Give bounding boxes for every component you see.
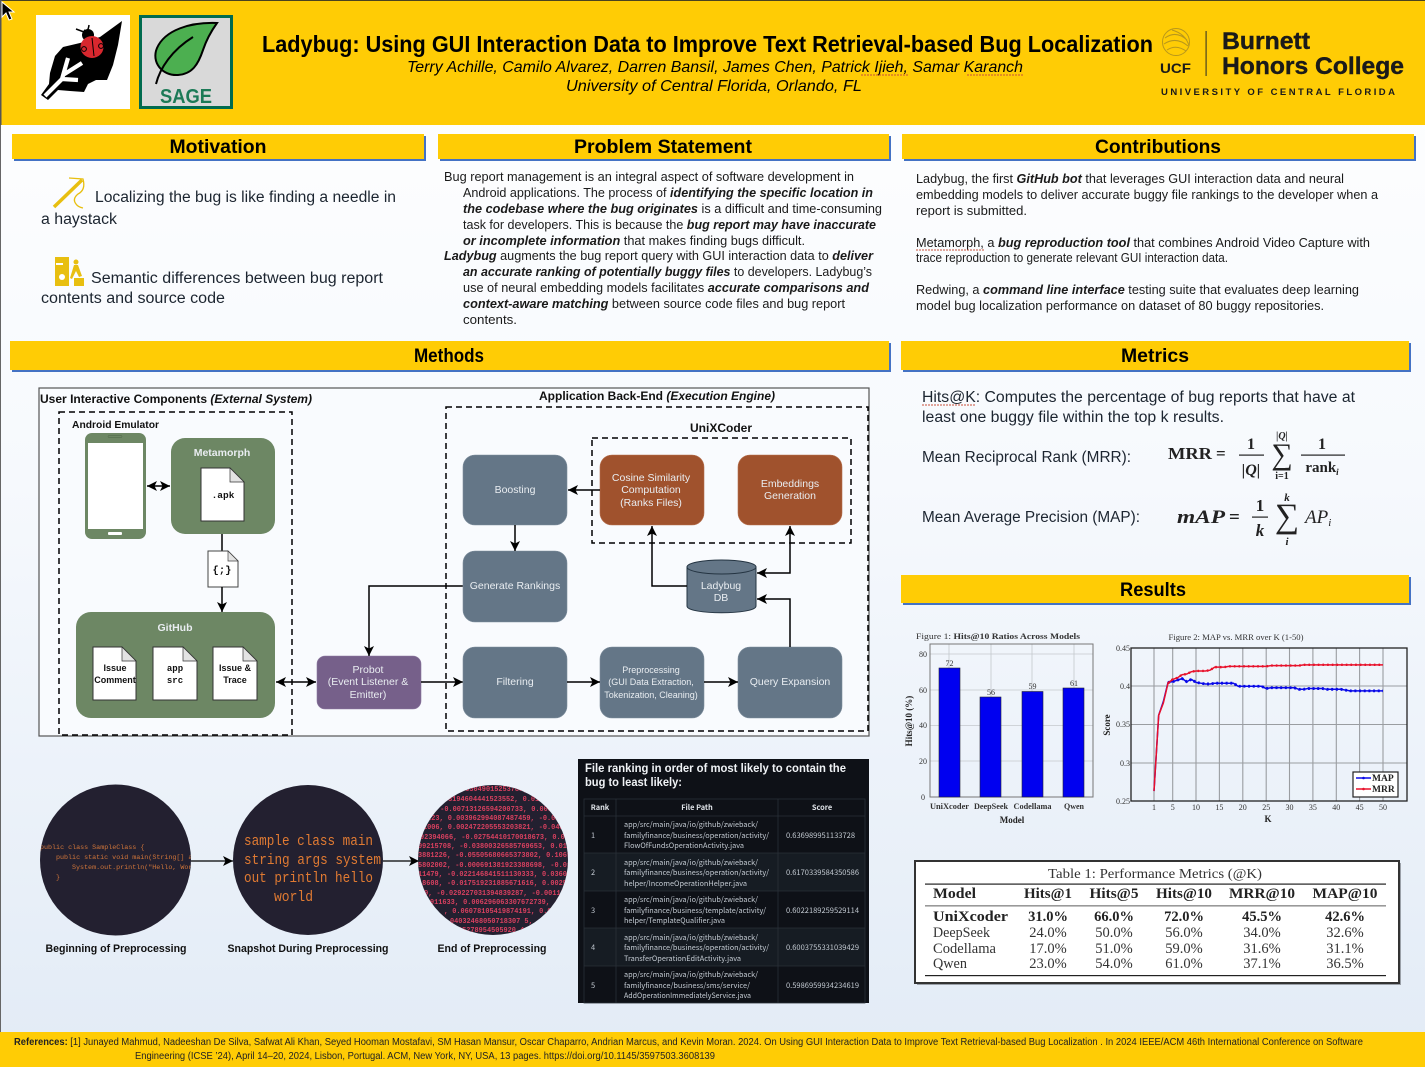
table row: Qwen: 37.1% (1243, 956, 1281, 972)
formula: map: ∑ (1275, 498, 1299, 535)
table header (933, 886, 1378, 902)
panel: problem statement (438, 134, 891, 327)
table row 2: 0.6170339584350586 (786, 867, 859, 878)
chart legend: MAP (1372, 774, 1394, 784)
table row 5: 0.5986959934234619 (786, 980, 859, 991)
heading: contributions (902, 134, 1416, 161)
stage: snapshot during preprocessing (228, 785, 388, 955)
table row: UniXcoder: 72.0% (1164, 909, 1204, 925)
stage: snapshot during preprocessing: out println hello (244, 871, 373, 887)
box: filtering (463, 647, 567, 718)
text: ladybug contribution (916, 172, 1378, 218)
bar chart: hits at 10: 72 (946, 659, 954, 668)
box: preprocessing: (GUI Data Extraction, (608, 677, 694, 687)
formula: map: k (1256, 521, 1265, 540)
box: github: src (167, 676, 183, 686)
chart axis labels: 40 (1332, 803, 1340, 812)
chart axis labels: 15 (1215, 803, 1223, 812)
box: github: Trace (223, 675, 247, 685)
text: redwing contribution (916, 283, 1359, 313)
chart axis labels: 20 (1239, 803, 1247, 812)
box: probot (317, 656, 421, 709)
references (0, 1032, 1425, 1067)
table row: UniXcoder: 45.5% (1242, 909, 1282, 925)
stage: beginning of preprocessing: public static void main(String[] args) (56, 854, 208, 862)
stage: beginning of preprocessing: System.out.println("Hello, World!"); (72, 864, 216, 872)
box: github: app (167, 664, 183, 674)
icon: ladybug logo (36, 15, 130, 109)
table heading (585, 763, 846, 789)
formula: map: i (1328, 517, 1331, 529)
table row 3: helper/TemplateQualifier.java (624, 915, 725, 926)
table heading: bug to least likely: (585, 777, 682, 789)
box: metamorph: Metamorph (194, 447, 250, 459)
affiliation: University of Central Florida, Orlando, FL (566, 78, 862, 95)
text: problem statement body: contents. (463, 313, 517, 327)
text: needle in a haystack: Localizing the bug is like finding a needle in (95, 189, 396, 206)
table row: Codellama: 17.0% (1029, 941, 1067, 957)
table row 4: 4 (591, 942, 595, 953)
heading: methods (10, 341, 891, 372)
stage: end of preprocessing: 18608, -0.017519231885671616, 0.002535 (418, 880, 575, 888)
formula: mrr: 1 (1247, 436, 1255, 453)
table row 4 (591, 932, 859, 964)
bar chart: hits at 10: 40 (919, 721, 927, 730)
table row: Qwen (933, 956, 1364, 972)
stage: end of preprocessing: 1006, 0.002472205553203821, -0.04854 (423, 824, 572, 832)
panel: motivation (12, 134, 426, 307)
stage: beginning of preprocessing (40, 784, 191, 954)
box: metamorph: .apk (212, 490, 235, 501)
text: problem statement body (444, 170, 882, 327)
table header: Hits@10 (1156, 886, 1212, 902)
text: metamorph contribution (916, 236, 1370, 265)
bar chart: hits at 10: Codellama (1014, 802, 1052, 811)
table row: DeepSeek: 56.0% (1165, 925, 1203, 941)
box: preprocessing (600, 647, 704, 718)
performance metrics table (915, 861, 1401, 985)
bar chart: hits at 10: 80 (919, 650, 927, 659)
box: github: Issue & (219, 663, 252, 673)
heading: metrics (901, 341, 1411, 372)
box: probot: Emitter) (350, 689, 386, 701)
text: hits at k (922, 389, 1356, 426)
formula: map: = (1229, 507, 1240, 528)
formula: mrr: |Q| (1242, 462, 1260, 479)
stage: end of preprocessing: End of Preprocessing (438, 943, 546, 955)
formula: mrr: |Q| (1276, 431, 1288, 442)
table header: Hits@5 (1090, 886, 1138, 902)
table row: DeepSeek: DeepSeek (933, 925, 991, 941)
chart axis labels: 0.4 (1120, 682, 1130, 691)
panel: metrics (901, 341, 1411, 548)
series: MAP (1154, 679, 1383, 791)
formula: map: k (1284, 492, 1290, 504)
series: MRR (1154, 665, 1383, 791)
chart axis labels: 10 (1192, 803, 1200, 812)
UCF Burnett Honors College logo (1160, 28, 1404, 98)
stage: end of preprocessing: 5802002, -0.000691381923388698, -0.0160 (418, 862, 579, 870)
chart axis labels: 5 (1171, 803, 1175, 812)
heading: metrics: Metrics (1121, 346, 1189, 367)
box: cosine similarity (600, 455, 704, 525)
chart axis labels: 35 (1309, 803, 1317, 812)
stage: end of preprocessing: , -0.00713126594200733, 0.00532 (432, 806, 560, 814)
text: redwing contribution: Redwing, a command line interface testing suite that evaluates deep learning (916, 283, 1359, 297)
text: redwing contribution: model bug localization performance on dataset of 80 buggy repositories. (916, 299, 1324, 313)
formula: map: AP (1305, 507, 1328, 528)
stage: end of preprocessing: 911633, 0.006296063307672739, -0.02 (430, 899, 575, 907)
heading: results (901, 575, 1411, 605)
table row: DeepSeek: 34.0% (1243, 925, 1281, 941)
formula: map: 1 (1256, 496, 1264, 515)
table header row: File Path (681, 802, 713, 813)
box: generate rankings: Generate Rankings (470, 580, 560, 592)
UCF Burnett Honors College logo: UCF (1160, 60, 1191, 76)
text: problem statement body: Bug report management is an integral aspect of software development in (444, 170, 854, 184)
formula: mrr: 1 (1318, 436, 1326, 453)
UCF Burnett Honors College logo: Burnett (1222, 28, 1310, 55)
chart axis labels: 0.25 (1116, 797, 1130, 806)
formula: mrr: ∑ (1271, 438, 1293, 471)
references: Engineering (ICSE ’24), April 14–20, 2024, Lisbon, Portugal. ACM, New York, NY, USA, 13 pages. https://doi.org/10.1145/3597503.3608139 (135, 1051, 715, 1062)
text: problem statement body: the codebase where the bug originates is a difficult and time-consuming (463, 202, 882, 216)
box: github: GitHub (158, 622, 192, 634)
table row: DeepSeek (933, 925, 1364, 941)
file ranking table (578, 759, 869, 1003)
stage: end of preprocessing (418, 785, 581, 955)
chart axis labels: 25 (1262, 803, 1270, 812)
icon: SAGE logo: SAGE (160, 86, 212, 108)
box: preprocessing: Tokenization, Cleaning) (604, 690, 698, 700)
text: problem statement body: an accurate ranking of potentially buggy files to developers. Ladybug’s (463, 265, 872, 279)
stage: snapshot during preprocessing: Snapshot During Preprocessing (228, 943, 388, 955)
table row: Codellama: 51.0% (1095, 941, 1133, 957)
box: query expansion: Query Expansion (750, 676, 830, 688)
table row 2: 2 (591, 867, 595, 878)
formula: mrr: = (1216, 444, 1226, 463)
text: metamorph contribution: trace reproduction to generate relevant GUI interaction data. (916, 251, 1228, 265)
stage: end of preprocessing: 03194604441523552, 0.0124 (444, 796, 547, 804)
box: query expansion (738, 647, 842, 718)
table row 5: 5 (591, 980, 595, 991)
table row: UniXcoder (933, 909, 1365, 925)
formula: mrr (1168, 431, 1345, 482)
heading: contributions: Contributions (1095, 137, 1221, 158)
stage: end of preprocessing: 89, -0.029227031394839287, -0.001180 (420, 890, 569, 898)
title: Ladybug: Using GUI Interaction Data to Improve Text Retrieval-based Bug Localization (262, 31, 1153, 57)
panel: contributions (902, 134, 1416, 313)
box: cosine similarity: (Ranks Files) (620, 497, 682, 509)
text: semantic differences: Semantic differences between bug report (91, 270, 384, 287)
heading: motivation: Motivation (170, 137, 266, 158)
performance metrics table: Table 1: Performance Metrics (@K) (1048, 866, 1262, 881)
box: github: Issue (103, 663, 127, 673)
stage: end of preprocessing: 92394066, -0.02754410170018673, 0.01844 (420, 834, 581, 842)
table row: Qwen: 23.0% (1029, 956, 1067, 972)
table row: Codellama: 59.0% (1165, 941, 1203, 957)
chart axis labels: 30 (1286, 803, 1294, 812)
line chart: map vs mrr (1102, 632, 1407, 824)
stage: snapshot during preprocessing: world (274, 890, 313, 906)
table row: DeepSeek: 50.0% (1095, 925, 1133, 941)
chart axis labels: 0.3 (1120, 759, 1130, 768)
text: metamorph contribution: Metamorph, a bug reproduction tool that combines Android Video Capture with (916, 236, 1370, 250)
label: application back-end: Application Back-End (Execution Engine) (539, 389, 775, 403)
panel: results (901, 575, 1411, 985)
UCF Burnett Honors College logo: Honors College (1222, 53, 1404, 80)
heading: methods: Methods (414, 346, 484, 367)
text: problem statement body: Ladybug augments the bug report query with GUI interaction data to deliver (444, 249, 874, 263)
heading: motivation (12, 134, 426, 161)
box: generate rankings (463, 551, 567, 622)
box: boosting: Boosting (495, 484, 536, 496)
text: ladybug contribution: Ladybug, the first GitHub bot that leverages GUI interaction data and neural (916, 172, 1344, 186)
table row: Codellama (933, 941, 1364, 957)
database: ladybug db (687, 560, 756, 613)
bar chart: hits at 10: 20 (919, 757, 927, 766)
bar chart: hits at 10: 61 (1070, 679, 1078, 688)
database: ladybug db: DB (714, 592, 728, 604)
box: cosine similarity: Cosine Similarity (612, 472, 691, 484)
formula: mrr: i (1336, 467, 1339, 477)
table row: Codellama: 31.6% (1243, 941, 1281, 957)
box: boosting (463, 455, 567, 525)
table row: Qwen: Qwen (933, 956, 968, 972)
bar chart: hits at 10: Hits@10 (%) (904, 696, 914, 746)
bar chart: hits at 10: 56 (987, 688, 995, 697)
authors: Terry Achille, Camilo Alvarez, Darren Bansil, James Chen, Patrick Ijieh, Samar Karanch (407, 59, 1023, 76)
stage: end of preprocessing: 3881226, -0.05505680665373802, 0.106903 (418, 852, 579, 860)
text: ladybug contribution: report is submitted. (916, 204, 1027, 218)
table row 4: app/src/main/java/io/github/zwieback/ (624, 932, 758, 943)
table row 4: 0.6003755331039429 (786, 942, 859, 953)
box: embeddings generation (738, 455, 842, 525)
table row 2: familyfinance/business/operation/activity/ (624, 867, 769, 878)
text: mrr label: Mean Reciprocal Rank (MRR): (922, 449, 1131, 466)
table heading: File ranking in order of most likely to contain the (585, 763, 846, 775)
label: user interactive components: User Interactive Components (External System) (40, 392, 312, 406)
chart axis labels (1102, 644, 1387, 824)
table row 5 (591, 969, 859, 1001)
table row 1: app/src/main/java/io/github/zwieback/ (624, 819, 758, 830)
formula: mrr: MRR (1168, 444, 1213, 463)
table row 1: 0.636989951133728 (786, 830, 855, 841)
icon: json document: {;} (213, 565, 231, 577)
formula: mrr: rank (1305, 460, 1336, 476)
table row 3 (591, 894, 859, 926)
text: semantic differences (41, 270, 384, 307)
text: needle in a haystack (41, 189, 396, 228)
box: probot: Probot (353, 664, 384, 676)
heading: problem statement: Problem Statement (574, 137, 753, 158)
stage: snapshot during preprocessing: sample class main (244, 834, 373, 850)
formula: map: i (1285, 536, 1289, 548)
table row 1: FlowOfFundsOperationActivity.java (624, 840, 744, 851)
label: unixcoder: UniXCoder (690, 421, 752, 435)
table row: Codellama: Codellama (933, 941, 997, 957)
text: needle in a haystack: a haystack (41, 211, 117, 228)
UCF Burnett Honors College logo: UNIVERSITY OF CENTRAL FLORIDA (1161, 87, 1395, 98)
table row: UniXcoder: UniXcoder (933, 909, 1009, 925)
bar chart: hits at 10: Model (1000, 815, 1025, 825)
table row 3: 3 (591, 905, 595, 916)
box: embeddings generation: Embeddings (761, 478, 819, 490)
table row: DeepSeek: 24.0% (1029, 925, 1067, 941)
table header: Hits@1 (1024, 886, 1072, 902)
box: probot: (Event Listener & (328, 676, 408, 688)
chart axis labels: 0.45 (1116, 644, 1130, 653)
bar chart: hits at 10: 59 (1028, 682, 1036, 691)
stage: end of preprocessing: 11479, -0.022146841511130333, 0.036092 (418, 871, 575, 879)
stage: beginning of preprocessing: public class SampleClass { (40, 844, 144, 852)
table row: Codellama: 31.1% (1326, 941, 1364, 957)
table header row: Rank (591, 802, 610, 813)
table row 3: app/src/main/java/io/github/zwieback/ (624, 894, 758, 905)
table row 1: familyfinance/business/operation/activity/ (624, 830, 769, 841)
table row 2 (591, 857, 859, 889)
table header row: Score (812, 802, 832, 813)
formula: mrr: i=1 (1275, 471, 1289, 482)
bar chart: hits at 10: UniXcoder (930, 802, 969, 811)
table row 4: TransferOperationEditActivity.java (624, 953, 741, 964)
table row 5: AddOperationImmediatelyService.java (624, 990, 751, 1001)
chart axis labels: K (1264, 814, 1272, 824)
table header: MRR@10 (1229, 886, 1295, 902)
stage: end of preprocessing: 8223, 0.003962994087487459, -0.02318 (423, 815, 572, 823)
icon: needle (54, 178, 84, 208)
table row 3: familyfinance/business/template/activity/ (624, 905, 766, 916)
text: ladybug contribution: embedding models to deliver accurate buggy file rankings to the developer when a (916, 188, 1378, 202)
preprocessing stages (40, 784, 581, 955)
table row 2: helper/IncomeOperationHelper.java (624, 878, 747, 889)
stage: beginning of preprocessing: Beginning of Preprocessing (46, 943, 186, 955)
chart axis labels: Score (1102, 714, 1112, 736)
box: embeddings generation: Generation (764, 490, 816, 502)
text: hits at k: Hits@K: Computes the percentage of bug reports that have at (922, 389, 1356, 406)
text: problem statement body: or incomplete information that makes finding bugs difficult. (463, 234, 805, 248)
table row 2: app/src/main/java/io/github/zwieback/ (624, 857, 758, 868)
table row: UniXcoder: 66.0% (1094, 909, 1134, 925)
icon: phone (85, 433, 146, 539)
table row 5: app/src/main/java/io/github/zwieback/ (624, 969, 758, 980)
box: metamorph (171, 438, 275, 534)
box: preprocessing: Preprocessing (622, 665, 680, 675)
table row 1 (591, 819, 855, 851)
architecture diagram (39, 388, 869, 736)
box: github: Comment (94, 675, 136, 685)
table row: Qwen: 54.0% (1095, 956, 1133, 972)
bar chart: hits at 10: Qwen (1064, 802, 1085, 811)
chart legend: MRR (1372, 785, 1395, 795)
heading: results: Results (1120, 580, 1186, 601)
table row 4: familyfinance/business/operation/activity/ (624, 942, 769, 953)
stage: end of preprocessing: 95278954505920 4 (458, 927, 524, 935)
table row: Qwen: 36.5% (1326, 956, 1364, 972)
box: cosine similarity: Computation (621, 484, 681, 496)
formula: map (1177, 492, 1331, 548)
table row 3: 0.6022189259529114 (786, 905, 859, 916)
chart legend (1353, 772, 1398, 797)
table row: UniXcoder: 42.6% (1325, 909, 1365, 925)
table row 1: 1 (591, 830, 595, 841)
table row: DeepSeek: 32.6% (1326, 925, 1364, 941)
label: android emulator: Android Emulator (72, 419, 159, 431)
text: semantic differences: contents and source code (41, 290, 225, 307)
icon: semantic gap (55, 257, 84, 286)
heading: problem statement (438, 134, 891, 161)
bar chart: hits at 10: DeepSeek (974, 802, 1009, 811)
formula: map: mAP (1177, 507, 1225, 528)
bar chart: hits at 10: Figure 1: Hits@10 Ratios Across Models (916, 631, 1081, 641)
table row 5: familyfinance/business/sms/service/ (624, 980, 750, 991)
bar chart: hits at 10: 0 (921, 793, 925, 802)
stage: end of preprocessing: 09215708, -0.03800326585769653, 0.01124 (418, 843, 579, 851)
text: map label: Mean Average Precision (MAP): (922, 509, 1140, 526)
text: problem statement body: task for developers. This is because the bug report may have inaccurate (463, 218, 876, 232)
text: hits at k: least one buggy file within the top k results. (922, 409, 1224, 426)
bar chart: hits at 10 (904, 631, 1093, 825)
box: github (76, 612, 275, 718)
stage: snapshot during preprocessing: string args system (244, 853, 381, 869)
chart axis labels: 0.35 (1116, 720, 1130, 729)
database: ladybug db: Ladybug (701, 580, 741, 592)
icon: SAGE logo (140, 16, 232, 108)
icon: json document (208, 551, 238, 587)
header banner (0, 0, 1425, 125)
text: problem statement body: use of neural embedding models facilitates accurate comparisons and (463, 281, 869, 295)
table row: Qwen: 61.0% (1165, 956, 1203, 972)
chart axis labels: 1 (1152, 803, 1156, 812)
panel: methods (10, 341, 891, 736)
table header row (591, 802, 832, 813)
text: problem statement body: context-aware matching between source code files and bug report (463, 297, 845, 311)
text: problem statement body: Android applications. The process of identifying the specific location in (463, 186, 873, 200)
stage: beginning of preprocessing: } (56, 874, 60, 882)
stage: end of preprocessing: 04032468050718307 5, -0.0 (450, 918, 553, 926)
chart axis labels: 50 (1379, 803, 1387, 812)
table header: MAP@10 (1312, 886, 1378, 902)
bar chart: hits at 10: 60 (919, 686, 927, 695)
stage: end of preprocessing: , 0.06078105419874191, 0.0343 (444, 908, 564, 916)
chart axis labels: 45 (1356, 803, 1364, 812)
icon: mouse cursor (2, 2, 14, 20)
box: filtering: Filtering (496, 676, 534, 688)
references: References: [1] Junayed Mahmud, Nadeeshan De Silva, Safwat Ali Khan, Seyed Hooman Mostafavi, SM Hasan Mansur, Oscar Chaparro, Andrian Marcus, and Kevin Moran. 2024. On Using GUI Interaction Data to Improve Text Retrieval-based Bug Localization . In 2024 IEEE/ACM 46th International Conference on Software (14, 1037, 1363, 1048)
table row: UniXcoder: 31.0% (1028, 909, 1068, 925)
line chart: map vs mrr: Figure 2: MAP vs. MRR over K (1-50) (1168, 632, 1304, 642)
table header: Model (933, 886, 976, 902)
stage: end of preprocessing: 4453049015253785, 0.0 (457, 786, 544, 794)
